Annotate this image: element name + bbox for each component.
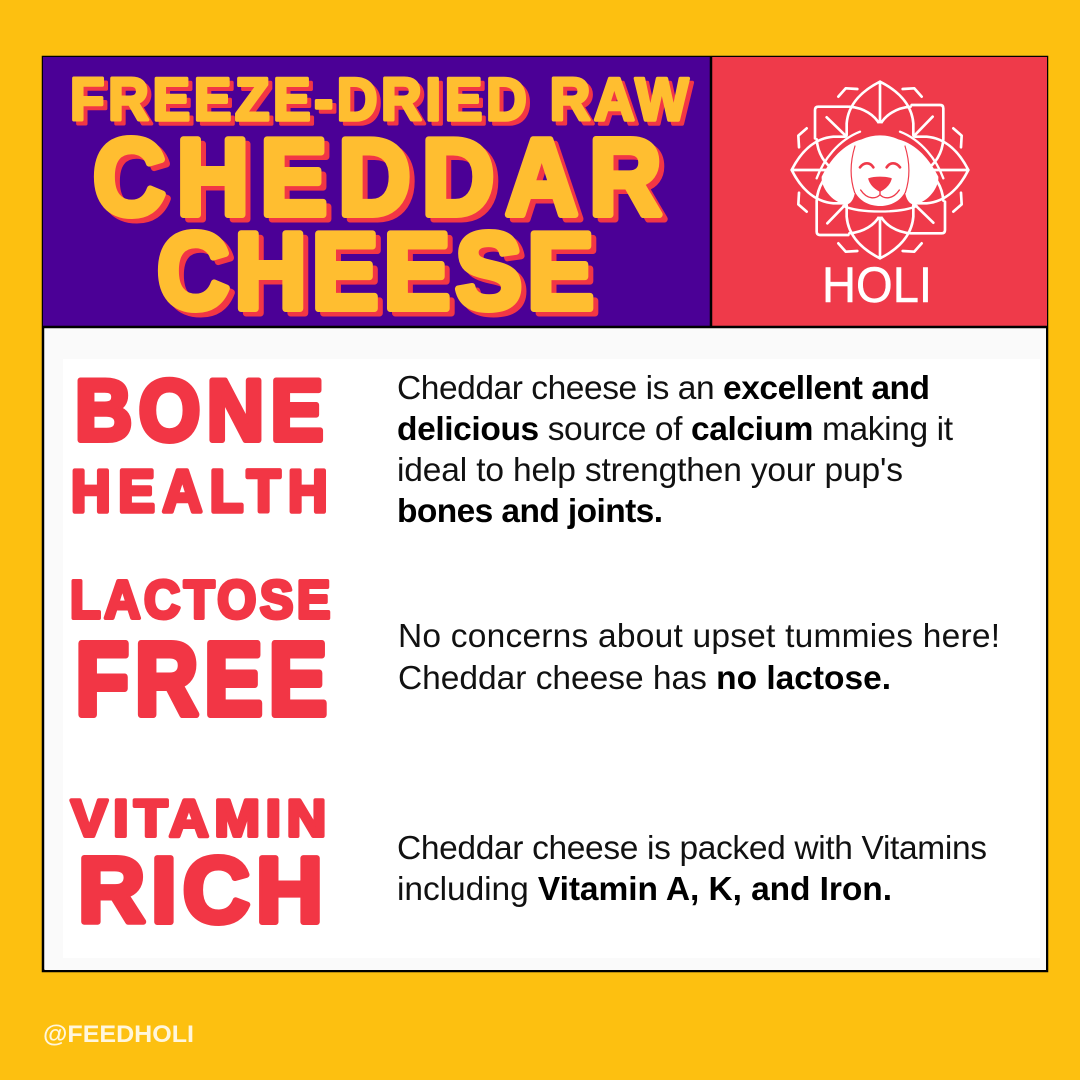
heading: lactose free <box>70 570 330 737</box>
title: freeze-dried raw: FREEZE-DRIED RAW <box>70 66 689 133</box>
divider lines <box>43 57 1047 327</box>
heading: lactose free: FREE <box>76 622 327 737</box>
title: cheddar: CHEDDAR <box>93 117 662 238</box>
text: bone health description: bones and joints. <box>397 493 663 530</box>
heading: vitamin rich: VITAMIN <box>71 790 326 848</box>
logo wordmark: HOLI <box>822 257 932 313</box>
panel: main card <box>43 57 1047 971</box>
title: cheddar: CHEDDAR <box>98 121 667 243</box>
text: bone health description: Cheddar cheese is an excellent and <box>397 370 930 407</box>
heading: bone health <box>71 362 328 525</box>
title: cheese: CHEESE <box>157 211 594 332</box>
title: freeze-dried raw: FREEZE-DRIED RAW <box>74 70 693 137</box>
heading: lactose free: LACTOSE <box>70 570 330 630</box>
heading: vitamin rich: RICH <box>78 838 323 942</box>
text: lactose free description: Cheddar cheese has no lactose. <box>398 660 891 697</box>
heading: bone health: BONE <box>75 362 323 459</box>
text: bone health description: delicious source of calcium making it <box>397 411 953 448</box>
text: vitamin rich description: including Vitamin A, K, and Iron. <box>397 871 892 908</box>
dog head <box>817 123 943 217</box>
panel: title banner <box>43 57 711 337</box>
text: lactose free description: No concerns about upset tummies here! <box>398 618 1000 655</box>
social handle: @FEEDHOLI <box>43 1021 194 1048</box>
icon: holi mandala dog logo <box>792 82 968 258</box>
title: cheese: CHEESE <box>162 215 599 337</box>
heading: bone health: HEALTH <box>71 459 328 525</box>
panel: logo background <box>711 57 1047 327</box>
text: vitamin rich description: Cheddar cheese is packed with Vitamins <box>397 830 987 867</box>
heading: vitamin rich <box>71 790 326 942</box>
text: bone health description: ideal to help strengthen your pup's <box>397 452 903 489</box>
